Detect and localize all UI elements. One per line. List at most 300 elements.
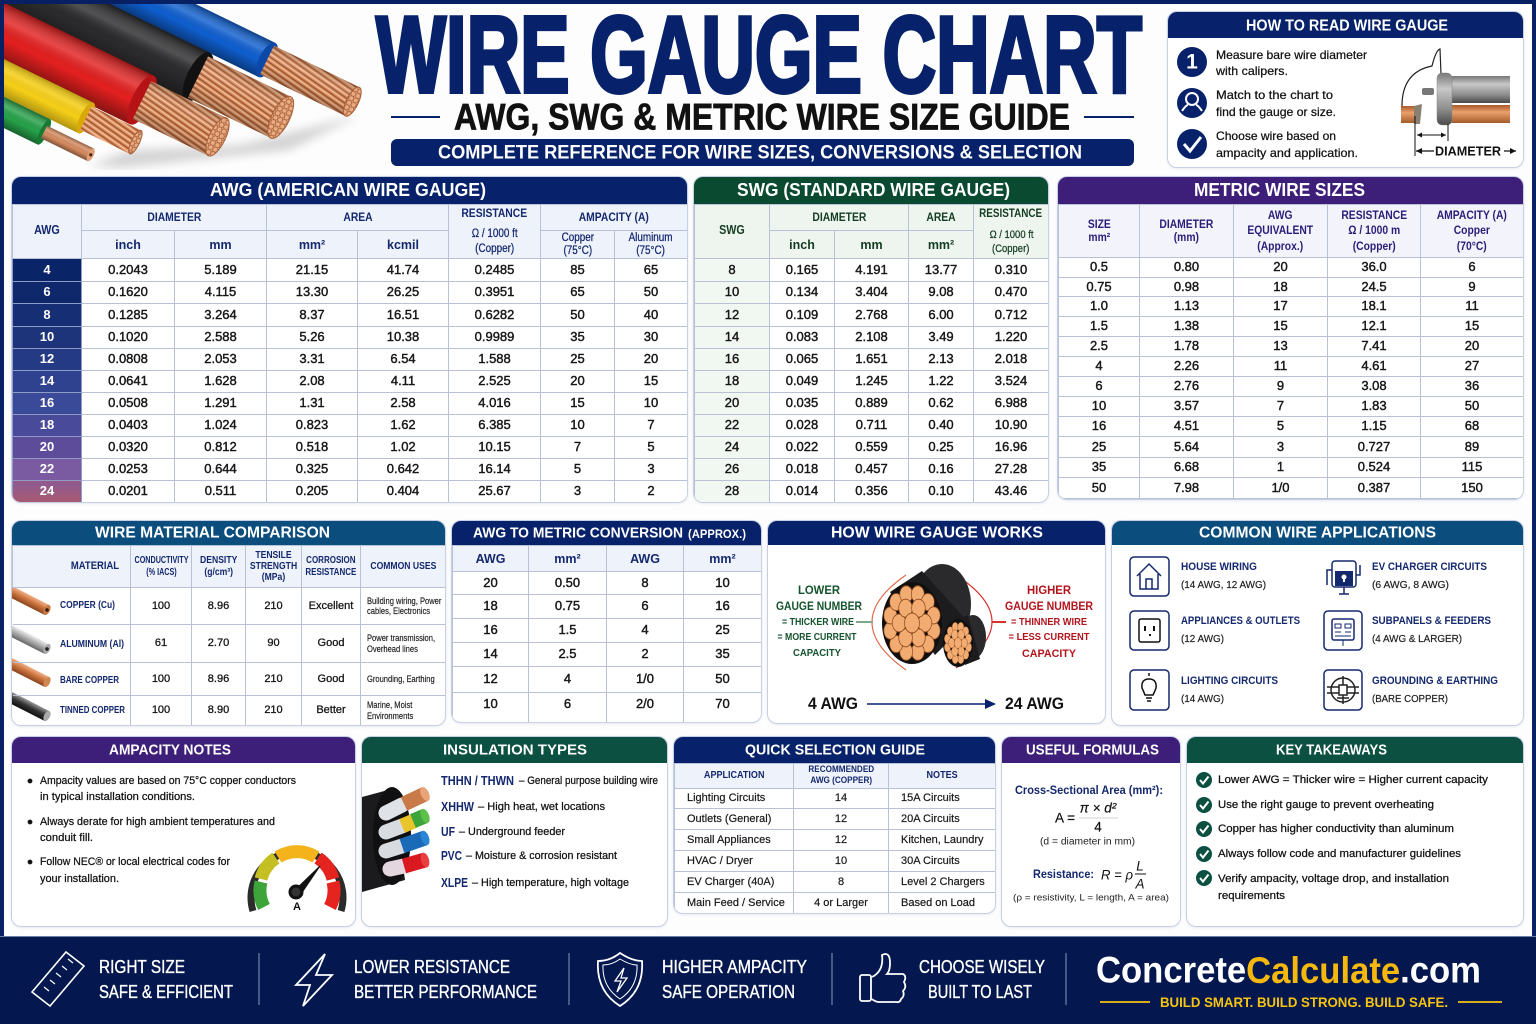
takeaway 5: requirements — [1218, 890, 1286, 902]
material names — [60, 599, 125, 716]
panel: AWG table — [12, 177, 687, 502]
metric data table: 9 — [1277, 378, 1284, 393]
UF text: – Underground feeder — [459, 826, 565, 838]
conversion table: 12 — [483, 671, 498, 686]
AWG data table: 0.0253 — [108, 461, 148, 476]
metric data table: 27 — [1465, 358, 1479, 373]
metric data table: 3 — [1277, 439, 1284, 454]
SWG data table: AREA — [926, 210, 956, 224]
metric data table: Ω / 1000 m — [1348, 223, 1400, 237]
material table: CONDUCTIVITY — [134, 555, 188, 566]
appliances text: APPLIANCES & OUTLETS — [1181, 615, 1300, 627]
SWG data table: 0.889 — [855, 395, 888, 410]
conversion table: 50 — [715, 671, 730, 686]
conversion table: 10 — [483, 696, 498, 711]
choose wisely text: BUILT TO LAST — [928, 982, 1032, 1002]
panel: quick selection guide — [674, 737, 995, 913]
AWG data table: 1.024 — [204, 417, 237, 432]
SWG data table: 0.028 — [786, 417, 818, 432]
AWG data table: 40 — [644, 307, 658, 322]
diameter label — [1416, 144, 1516, 158]
AWG data table: 0.0808 — [108, 351, 148, 366]
lighting text: (14 AWG) — [1181, 693, 1224, 705]
AWG data table: 8.37 — [299, 307, 325, 322]
SWG data table: 2.108 — [855, 329, 888, 344]
AWG data table: 6.54 — [390, 351, 416, 366]
panel: how to read wire gauge — [1168, 12, 1523, 167]
EV charger text — [1372, 561, 1487, 591]
SWG data table: 28 — [725, 483, 739, 498]
SWG data table: Ω / 1000 ft — [989, 229, 1033, 241]
heading: HOW TO READ WIRE GAUGE — [1246, 18, 1448, 34]
AWG data table: 10 — [40, 329, 54, 344]
AWG data table: 2.08 — [299, 373, 325, 388]
icon: shield — [598, 953, 642, 1006]
conversion table: 6 — [564, 696, 571, 711]
metric data table — [1058, 204, 1523, 499]
AWG data table: 25.67 — [478, 483, 511, 498]
SWG data table: 0.018 — [786, 461, 818, 476]
AWG data table: 2.053 — [204, 351, 237, 366]
resistance formula: R = ρ — [1101, 868, 1133, 882]
heading — [1112, 521, 1523, 545]
AWG data table: 13.30 — [296, 284, 328, 299]
conversion table: 16 — [483, 622, 498, 637]
heading: AMPACITY NOTES — [109, 742, 231, 758]
arrow: gauge direction — [867, 699, 996, 709]
AWG data table: (Copper) — [475, 243, 514, 255]
UF text: UF — [441, 825, 455, 839]
subtitle banner: COMPLETE REFERENCE FOR WIRE SIZES, CONVERSIONS & SELECTION — [438, 142, 1082, 164]
selection table: 12 — [835, 813, 847, 825]
AWG data table: 4.016 — [478, 395, 511, 410]
SWG data table: 0.457 — [855, 461, 888, 476]
AWG data table: RESISTANCE — [462, 206, 527, 220]
SWG data table: 2.13 — [928, 351, 954, 366]
SWG data table: 10.90 — [995, 417, 1027, 432]
grounding text: (BARE COPPER) — [1372, 693, 1448, 705]
heading: HOW WIRE GAUGE WORKS — [831, 524, 1043, 542]
icon: ampacity gauge — [251, 852, 343, 913]
metric data table: 7.41 — [1361, 338, 1387, 353]
AWG data table: DIAMETER — [147, 210, 201, 224]
icon: grounding — [1324, 670, 1362, 710]
material table: 61 — [155, 637, 167, 649]
material table: Building wiring, Power — [367, 596, 441, 606]
selection table: HVAC / Dryer — [687, 855, 753, 867]
step 1 icon: 1 — [1186, 50, 1198, 74]
diagram: thick and thin cable cross sections — [856, 564, 1006, 670]
AWG data table: 0.325 — [296, 461, 328, 476]
heading — [1168, 12, 1523, 38]
heading — [12, 737, 355, 763]
AWG data table: 20 — [644, 351, 658, 366]
metric data table: 36 — [1465, 378, 1479, 393]
icon: outlet — [1130, 611, 1169, 650]
higher gauge label: HIGHER — [1027, 583, 1071, 597]
AWG data table: 0.3951 — [475, 284, 514, 299]
conversion table: 16 — [715, 598, 730, 613]
diameter label: DIAMETER — [1435, 144, 1502, 158]
material table: Marine, Moist — [367, 700, 412, 710]
metric data table: 18.1 — [1361, 298, 1387, 313]
metric data table: 4.61 — [1361, 358, 1387, 373]
lower gauge label: GAUGE NUMBER — [776, 599, 862, 613]
metric data table: 1.13 — [1174, 298, 1199, 313]
metric data table: 1.83 — [1361, 398, 1387, 413]
AWG data table: 22 — [40, 461, 54, 476]
metric data table: 1.5 — [1090, 318, 1108, 333]
SWG data table: 1.651 — [855, 351, 888, 366]
conversion table — [452, 545, 761, 722]
AWG data table: 14 — [40, 373, 54, 388]
material table — [12, 545, 445, 725]
SWG data table — [694, 204, 1048, 502]
AWG data table: 5.189 — [204, 262, 237, 277]
takeaway 4 — [1196, 846, 1462, 862]
metric data table: 10 — [1092, 398, 1106, 413]
footer band — [0, 936, 1536, 1024]
AWG data table: 2.525 — [478, 373, 511, 388]
heading: QUICK SELECTION GUIDE — [745, 742, 925, 758]
material table: cables, Electronics — [367, 606, 430, 616]
AWG data table: mm — [209, 238, 232, 252]
material table: Good — [318, 673, 344, 685]
panel: AWG to metric conversion — [452, 521, 761, 722]
AWG data table — [12, 204, 687, 502]
selection table: Kitchen, Laundry — [901, 834, 984, 846]
metric data table: 9 — [1468, 279, 1476, 294]
AWG data table: 26.25 — [387, 284, 419, 299]
24 AWG label: 24 AWG — [1005, 695, 1064, 713]
rod: aluminum — [7, 625, 52, 655]
AWG data table: 65 — [570, 284, 585, 299]
AWG data table: 4.11 — [391, 373, 415, 388]
metric data table: 5 — [1277, 418, 1284, 433]
selection table: AWG (COPPER) — [810, 775, 872, 786]
rod: tinned copper — [7, 692, 52, 722]
material names: COPPER (Cu) — [60, 599, 115, 611]
heading: WIRE MATERIAL COMPARISON — [95, 524, 330, 542]
conversion table: 2 — [641, 646, 649, 661]
lower gauge label: LOWER — [798, 583, 840, 597]
subpanels text — [1372, 615, 1491, 645]
metric data table: 15 — [1465, 318, 1479, 333]
heading: KEY TAKEAWAYS — [1276, 742, 1387, 758]
metric data table: 36.0 — [1361, 259, 1387, 274]
step 2 icon — [1177, 88, 1207, 118]
material table: Overhead lines — [367, 644, 418, 654]
material table: 8.96 — [208, 673, 229, 685]
metric data table: 50 — [1092, 480, 1106, 495]
step 3 text — [1216, 129, 1358, 160]
heading: SWG (STANDARD WIRE GAUGE) — [737, 180, 1010, 200]
heading — [12, 521, 445, 545]
metric data table: 18 — [1273, 279, 1288, 294]
heading — [768, 521, 1105, 545]
appliances text — [1181, 615, 1300, 645]
grounding text — [1372, 675, 1498, 705]
SWG data table: 0.014 — [786, 483, 818, 498]
metric data table: EQUIVALENT — [1248, 223, 1313, 237]
metric data table: 1.0 — [1090, 298, 1108, 313]
metric data table: 7 — [1277, 398, 1284, 413]
illustration: multi-core cable — [362, 786, 432, 892]
material table: 210 — [264, 704, 283, 716]
lower gauge label: = THICKER WIRE — [782, 616, 854, 628]
SWG data table: 0.134 — [786, 284, 818, 299]
SWG data table: DIAMETER — [812, 210, 866, 224]
heading — [1187, 737, 1523, 763]
SWG data table: 1.220 — [995, 329, 1027, 344]
step 2 text: find the gauge or size. — [1216, 105, 1336, 119]
heading: USEFUL FORMULAS — [1026, 742, 1159, 758]
metric data table: SIZE — [1088, 217, 1110, 231]
material table: DENSITY — [200, 555, 237, 566]
SWG data table: 20 — [725, 395, 739, 410]
lower gauge label: CAPACITY — [793, 647, 841, 659]
SWG data table: 16.96 — [995, 439, 1027, 454]
resistance formula: A — [1134, 876, 1145, 892]
metric data table: 0.727 — [1358, 439, 1390, 454]
material table: (g/cm³) — [204, 566, 233, 578]
conversion table: AWG — [476, 552, 505, 566]
rod: bare copper — [7, 658, 52, 688]
heading — [452, 521, 761, 545]
metric data table: 150 — [1461, 480, 1483, 495]
AWG data table: 1.291 — [204, 395, 237, 410]
metric data table: (Approx.) — [1258, 239, 1303, 253]
SWG data table: 0.711 — [856, 417, 887, 432]
lower resistance text — [354, 957, 537, 1002]
SWG data table: 0.559 — [855, 439, 888, 454]
material table: (MPa) — [262, 572, 285, 583]
icon: light bulb — [1130, 670, 1169, 710]
metric data table: 68 — [1465, 418, 1479, 433]
AWG data table: 0.644 — [204, 461, 237, 476]
EV charger text: (6 AWG, 8 AWG) — [1372, 579, 1449, 591]
metric data table: 3.08 — [1361, 378, 1387, 393]
resistance formula: Resistance: — [1033, 867, 1094, 881]
SWG data table: (Copper) — [992, 243, 1030, 255]
step 1 text: Measure bare wire diameter — [1216, 48, 1367, 62]
AWG data table: 4 — [43, 262, 51, 277]
SWG data table: 3.49 — [928, 329, 954, 344]
house wiring text: HOUSE WIRING — [1181, 561, 1257, 573]
AWG data table: 6.385 — [478, 417, 511, 432]
AWG data table: 35 — [570, 329, 585, 344]
metric data table: 11 — [1465, 298, 1479, 313]
SWG data table: 0.083 — [786, 329, 818, 344]
AWG data table: mm² — [299, 238, 325, 252]
AWG data table: 10.15 — [478, 439, 511, 454]
metric data table: 4 — [1095, 358, 1103, 373]
heading: (APPROX.) — [688, 527, 746, 541]
icon: subpanel — [1324, 611, 1362, 650]
AWG data table: 16.51 — [387, 307, 419, 322]
selection table: APPLICATION — [704, 769, 764, 781]
brand tagline: BUILD SMART. BUILD STRONG. BUILD SAFE. — [1160, 994, 1448, 1010]
icon: EV charger — [1327, 561, 1360, 594]
metric data table: 4.51 — [1174, 418, 1199, 433]
AWG data table: 6 — [43, 284, 51, 299]
metric data table: (mm) — [1174, 230, 1199, 244]
AWG data table: 50 — [570, 307, 585, 322]
SWG data table: 8 — [728, 262, 736, 277]
conversion table: 2.5 — [558, 646, 577, 661]
higher gauge label: GAUGE NUMBER — [1005, 599, 1093, 613]
step 2 text: Match to the chart to — [1216, 88, 1333, 102]
lower gauge label: = MORE CURRENT — [778, 631, 857, 643]
right size text: SAFE & EFFICIENT — [99, 982, 233, 1002]
metric data table: 0.98 — [1174, 279, 1199, 294]
material names: TINNED COPPER — [60, 704, 125, 716]
AWG data table: AMPACITY (A) — [579, 210, 649, 224]
note 3: your installation. — [40, 873, 119, 885]
metric data table: 20 — [1465, 338, 1479, 353]
conversion table: 14 — [483, 646, 498, 661]
material table: TENSILE — [255, 550, 292, 561]
SWG data table: 6.988 — [995, 395, 1027, 410]
THHN text — [441, 774, 658, 788]
material table: COMMON USES — [370, 561, 436, 572]
AWG data table: 0.1020 — [108, 329, 148, 344]
takeaway 1: Lower AWG = Thicker wire = Higher current capacity — [1218, 774, 1489, 786]
conversion table: 0.75 — [555, 598, 580, 613]
metric data table: AWG — [1268, 208, 1293, 222]
AWG data table: 0.0201 — [108, 483, 148, 498]
SWG data table: 0.022 — [786, 439, 818, 454]
AWG data table: 0.2043 — [108, 262, 148, 277]
4 AWG label: 4 AWG — [808, 695, 858, 713]
selection table: Small Appliances — [687, 834, 771, 846]
metric data table: 16 — [1092, 418, 1106, 433]
material names: BARE COPPER — [60, 674, 119, 686]
SWG data table: 2.018 — [995, 351, 1027, 366]
material table: 8.90 — [208, 704, 229, 716]
step 2 text — [1216, 88, 1336, 119]
higher ampacity text: SAFE OPERATION — [662, 982, 795, 1002]
AWG data table: 10 — [570, 417, 585, 432]
metric data table: 0.524 — [1358, 459, 1390, 474]
higher ampacity text — [662, 957, 807, 1002]
selection table: 10 — [835, 855, 847, 867]
conversion table: 2/0 — [636, 696, 654, 711]
AWG data table: 16.14 — [478, 461, 511, 476]
hero image: coloured stranded wires — [4, 4, 362, 170]
metric data table: (Copper) — [1352, 239, 1395, 253]
icon: thumbs up — [860, 954, 905, 1002]
metric data table: 1.15 — [1361, 418, 1387, 433]
heading: INSULATION TYPES — [443, 742, 587, 758]
panel: SWG table — [694, 177, 1048, 502]
AWG data table: 10.38 — [387, 329, 419, 344]
material table: Environments — [367, 710, 413, 720]
metric data table: 0.387 — [1358, 480, 1390, 495]
AWG data table: 5 — [574, 461, 581, 476]
metric data table: 24.5 — [1361, 279, 1387, 294]
selection table: EV Charger (40A) — [687, 876, 774, 888]
metric data table: DIAMETER — [1160, 217, 1213, 231]
selection table: 15A Circuits — [901, 792, 960, 804]
AWG data table: 1.31 — [299, 395, 325, 410]
SWG data table: 3.524 — [995, 373, 1027, 388]
metric data table: 35 — [1092, 459, 1106, 474]
step 1 text: with calipers. — [1215, 64, 1288, 78]
selection table: Main Feed / Service — [687, 897, 785, 909]
AWG data table: (75°C) — [563, 244, 592, 256]
area formula label: Cross-Sectional Area (mm²): — [1015, 783, 1163, 797]
SWG data table: 0.109 — [786, 307, 818, 322]
metric data table: 15 — [1273, 318, 1288, 333]
SWG data table: 18 — [725, 373, 739, 388]
selection table: 14 — [835, 792, 847, 804]
note 1 — [28, 775, 296, 803]
step 3 text: Choose wire based on — [1216, 129, 1336, 143]
AWG data table: 0.0403 — [108, 417, 148, 432]
higher ampacity text: HIGHER AMPACITY — [662, 957, 807, 977]
material table: 210 — [264, 600, 283, 612]
metric data table: 1.38 — [1174, 318, 1199, 333]
conversion table: 1.5 — [558, 622, 577, 637]
AWG data table: 0.823 — [296, 417, 328, 432]
note 2: Always derate for high ambient temperatures and — [40, 816, 275, 828]
icon: lightning — [296, 954, 332, 1006]
right size text: RIGHT SIZE — [99, 957, 185, 977]
AWG data table: 3 — [647, 461, 655, 476]
metric data table: 6 — [1095, 378, 1103, 393]
panel: common wire applications — [1112, 521, 1523, 725]
higher gauge label: CAPACITY — [1022, 648, 1077, 660]
takeaway 5: Verify ampacity, voltage drop, and installation — [1218, 873, 1449, 885]
AWG data table: 0.0641 — [108, 373, 148, 388]
choose wisely text: CHOOSE WISELY — [919, 957, 1045, 977]
SWG data table: 9.08 — [928, 284, 954, 299]
conversion table: 6 — [641, 598, 649, 613]
conversion table: 25 — [715, 622, 730, 637]
AWG data table: Aluminum — [629, 232, 673, 244]
metric data table: 6.68 — [1174, 459, 1199, 474]
EV charger text: EV CHARGER CIRCUITS — [1372, 561, 1487, 573]
metric data table: RESISTANCE — [1341, 208, 1407, 222]
heading — [694, 177, 1048, 204]
AWG data table: 20 — [40, 439, 54, 454]
takeaway 3 — [1196, 821, 1454, 837]
conversion table: AWG — [630, 552, 660, 566]
metric data table: 12.1 — [1361, 318, 1387, 333]
metric data table: 0.80 — [1174, 259, 1199, 274]
SWG data table: 1.22 — [928, 373, 954, 388]
subpanels text: (4 AWG & LARGER) — [1372, 633, 1462, 645]
rod: copper — [7, 586, 52, 616]
metric data table: AMPACITY (A) — [1437, 208, 1507, 222]
PVC text: PVC — [441, 849, 462, 863]
SWG data table: 10 — [725, 284, 739, 299]
area formula: π × d² — [1080, 800, 1117, 816]
conversion table: mm² — [554, 552, 581, 566]
AWG data table: 1.628 — [204, 373, 237, 388]
SWG data table: 0.356 — [855, 483, 888, 498]
AWG data table: 16 — [40, 395, 54, 410]
metric data table: 1.78 — [1174, 338, 1199, 353]
house wiring text — [1181, 561, 1266, 591]
XLPE text: – High temperature, high voltage — [472, 877, 629, 889]
metric data table: 20 — [1273, 259, 1288, 274]
AWG data table: 3.31 — [299, 351, 325, 366]
takeaway 3: Copper has higher conductivity than aluminum — [1218, 823, 1454, 835]
selection table: Outlets (General) — [687, 813, 771, 825]
note 1: Ampacity values are based on 75°C copper conductors — [40, 775, 296, 787]
